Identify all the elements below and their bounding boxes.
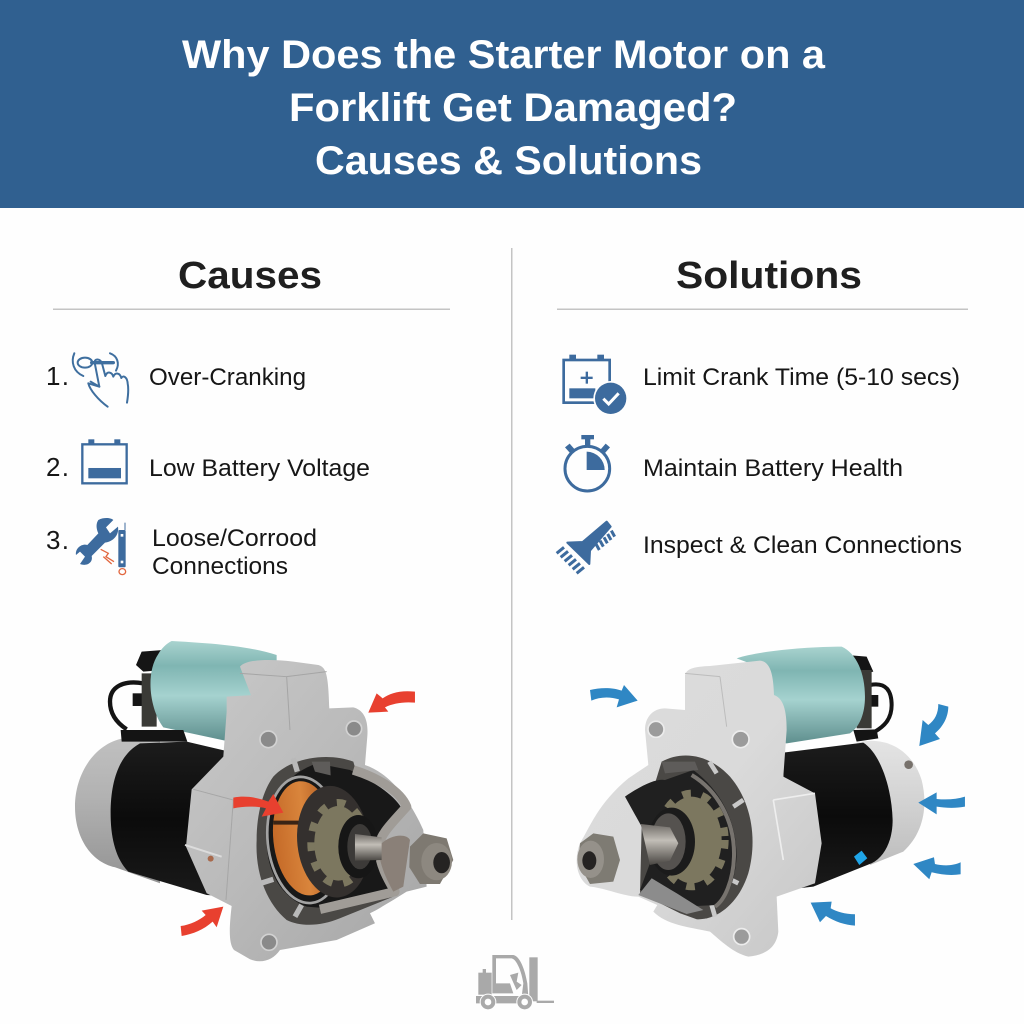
shaft: [338, 815, 382, 878]
blue arrows: [590, 685, 965, 926]
icon: forklift: [476, 955, 554, 1010]
pinion gear: [658, 793, 725, 887]
title: [182, 33, 826, 183]
icon: battery with check: [564, 355, 628, 416]
solution 2: maintain battery health: Maintain Battery Health: [643, 455, 903, 482]
solution 2: maintain battery health: [565, 435, 903, 491]
cause 2: low battery voltage: [46, 439, 127, 483]
cause 3 label: Loose/Corrood: [152, 525, 317, 552]
header banner: [0, 0, 1024, 208]
cause 2 label: Low Battery Voltage: [149, 455, 370, 482]
ring: [261, 773, 349, 907]
solution 3: inspect and clean: [557, 522, 962, 573]
cause 1: over-cranking: [46, 353, 128, 407]
cause 3 label: Connections: [152, 553, 288, 580]
mounting holes: [260, 721, 362, 950]
recess ring: [256, 757, 393, 925]
burnt ring: [292, 782, 375, 901]
title: Why Does the Starter Motor on a: [182, 33, 826, 77]
causes heading: Causes: [178, 255, 322, 297]
healthy starter motor: [577, 647, 965, 957]
bearing and shaft: [641, 808, 695, 876]
cause 2: low battery voltage: 2.: [46, 452, 69, 482]
housing: [186, 660, 427, 961]
solution 1: limit crank time: Limit Crank Time (5-10 secs): [643, 364, 960, 391]
panel: causes: [46, 255, 450, 580]
solution 1: limit crank time: [564, 355, 960, 416]
cause 1: over-cranking: 1.: [46, 361, 69, 391]
cavity: [625, 770, 737, 907]
ring: [692, 775, 734, 907]
icon: hand turning key: [73, 353, 128, 407]
icon: brush: [557, 522, 615, 573]
red arrows: [181, 691, 415, 936]
motor can: [783, 741, 924, 890]
wire and connectors: [847, 655, 892, 742]
panel: solutions: [557, 255, 968, 573]
pinion gear: [311, 803, 366, 884]
blue marker: [854, 851, 867, 865]
solenoid: [737, 647, 865, 743]
title: Forklift Get Damaged?: [289, 86, 737, 130]
motor can: [75, 730, 237, 897]
copper windings: [267, 778, 342, 899]
corroded band: [320, 770, 410, 909]
title: Causes & Solutions: [315, 139, 702, 183]
cause 3 label: [152, 525, 317, 580]
solution 3: inspect and clean: Inspect & Clean Connections: [643, 532, 962, 559]
damaged starter motor: [75, 641, 453, 961]
solutions heading: Solutions: [676, 255, 862, 297]
recess ring: [640, 756, 753, 919]
mounting holes: [648, 721, 750, 945]
cause 3: loose or corroded connections: [46, 518, 126, 575]
icon: low battery: [82, 439, 127, 483]
solenoid: [150, 641, 277, 741]
cause 3: loose or corroded connections: 3.: [46, 525, 69, 555]
cause 1 label: Over-Cranking: [149, 364, 306, 391]
icon: stopwatch: [565, 435, 610, 491]
icon: wrench and terminal: [76, 518, 126, 575]
cavity: [267, 763, 402, 908]
wire and connectors: [110, 650, 163, 729]
nut: [409, 833, 453, 884]
nut: [577, 833, 620, 884]
housing: [577, 661, 822, 957]
